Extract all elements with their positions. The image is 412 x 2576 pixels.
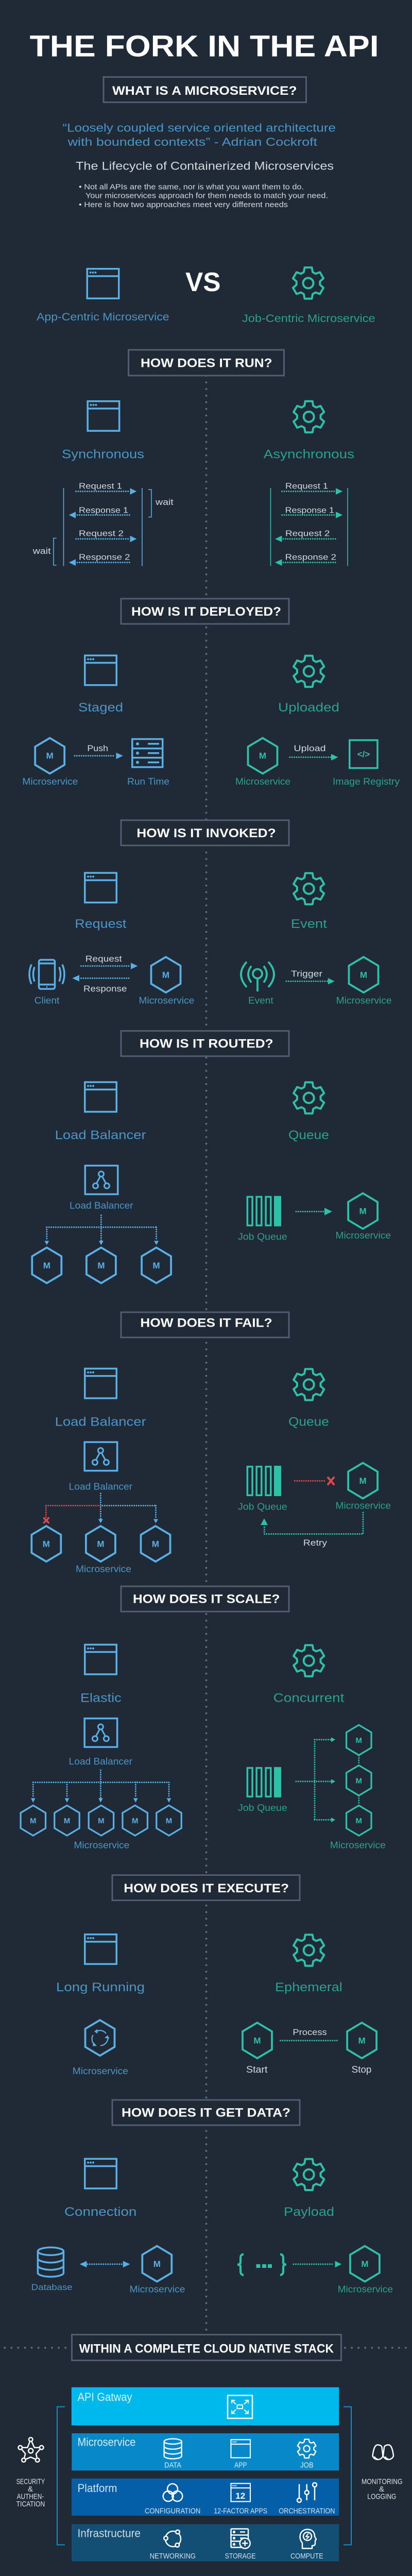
panel: asynchronous sequence: Request 2 [285, 530, 330, 538]
icon: load balancer [84, 1718, 117, 1747]
icon: load balancer [85, 1165, 118, 1194]
label: microservice: Microservice [336, 995, 392, 1006]
microservice hexagon [248, 738, 277, 774]
heading: fail: HOW DOES IT FAIL? [140, 1316, 272, 1330]
stop hexagon [347, 2023, 376, 2058]
routing arrows with failure [44, 1494, 158, 1523]
microservice hexagon [349, 957, 378, 992]
icon: client phone [29, 960, 64, 989]
panel: platform layer: CONFIGURATION [145, 2507, 200, 2516]
long running microservice hexagon [85, 2020, 114, 2056]
icon: gear [294, 873, 324, 904]
icon: app window [84, 1935, 117, 1964]
heading: what is a microservice [104, 77, 306, 102]
label: microservice: Microservice [330, 1839, 386, 1851]
heading: invoked [121, 820, 289, 845]
label: uploaded: Uploaded [278, 701, 339, 715]
icon: gear [294, 1369, 324, 1400]
heading: run [129, 350, 284, 376]
panel: platform layer: 12-FACTOR APPS [214, 2507, 267, 2516]
routing arrows [44, 1215, 159, 1245]
label: request: Request [75, 917, 127, 931]
label: connection: Connection [64, 2205, 136, 2219]
title: THE FORK IN THE API [30, 29, 379, 63]
microservice hexagons [21, 1805, 181, 1836]
panel: microservice layer: JOB [300, 2461, 314, 2469]
failed arrow [295, 1478, 334, 1484]
request and response arrows: Response [83, 984, 127, 993]
microservice hexagon: M [359, 1476, 367, 1486]
label: stop: Stop [352, 2064, 371, 2075]
retry arrow [261, 1513, 363, 1548]
bullet list [79, 183, 328, 209]
microservice hexagons: M [153, 1261, 160, 1270]
label: microservice: Microservice [338, 2283, 393, 2295]
icon: gear [294, 1645, 324, 1676]
label: job queue: Job Queue [238, 1802, 287, 1813]
panel: synchronous sequence: wait [32, 546, 51, 556]
icon: image registry [350, 740, 377, 768]
heading: deployed: HOW IS IT DEPLOYED? [131, 605, 281, 619]
label: start: Start [246, 2064, 267, 2075]
microservice hexagons: M [152, 1539, 159, 1549]
push arrow [75, 743, 123, 759]
label: load balancer: Load Balancer [70, 1200, 133, 1211]
label: long running: Long Running [56, 1980, 145, 1994]
heading: data [112, 2100, 300, 2125]
microservice hexagons: M [356, 1736, 362, 1745]
label: staged: Staged [78, 701, 123, 715]
icon: event antenna [241, 962, 274, 991]
quote [63, 122, 336, 148]
heading: execute [112, 1875, 300, 1900]
microservice hexagons: M [64, 1817, 70, 1825]
icon: app window [84, 1082, 117, 1112]
icon: gear [294, 656, 324, 687]
microservice hexagons: M [43, 1539, 50, 1549]
panel: platform layer: ORCHESTRATION [279, 2507, 335, 2516]
label: load balancer: Load Balancer [55, 1415, 146, 1429]
panel: synchronous sequence [32, 482, 174, 566]
panel: microservice layer [72, 2433, 339, 2470]
trigger arrow: Trigger [291, 969, 322, 978]
payload arrow [294, 2261, 341, 2267]
label: monitoring: MONITORING [362, 2478, 403, 2486]
label: synchronous: Synchronous [62, 447, 144, 461]
label: microservice: Microservice [130, 2283, 185, 2295]
panel: api gateway [72, 2387, 339, 2426]
icon: load balancer [84, 1442, 117, 1471]
microservice hexagon: M [361, 2259, 368, 2269]
label: load balancer: Load Balancer [55, 1128, 146, 1142]
microservice hexagons: M [97, 1261, 105, 1270]
icon: security star [19, 2437, 43, 2462]
label: monitoring [362, 2478, 403, 2501]
icon: job queue [247, 1767, 281, 1798]
icon: database [38, 2247, 63, 2277]
microservice hexagons: M [356, 1817, 362, 1825]
panel: synchronous sequence: Request 2 [79, 530, 124, 538]
label: job-centric: Job-Centric Microservice [242, 312, 375, 325]
icon: app window [84, 1368, 117, 1398]
label: client: Client [35, 995, 59, 1006]
panel: infrastructure layer: COMPUTE [290, 2552, 323, 2561]
icon: app window [84, 2159, 117, 2189]
icon: app window [84, 873, 117, 903]
label: elastic: Elastic [80, 1691, 122, 1705]
process arrow [280, 2027, 339, 2041]
heading: invoked: HOW IS IT INVOKED? [136, 826, 276, 840]
label: job queue: Job Queue [238, 1231, 287, 1242]
label: security: TICATION [16, 2500, 45, 2509]
heading: execute: HOW DOES IT EXECUTE? [124, 1882, 289, 1895]
label: job queue: Job Queue [238, 1501, 287, 1512]
microservice hexagons: M [97, 1539, 104, 1549]
microservice hexagon: M [46, 751, 54, 760]
icon: image registry: </> [357, 749, 370, 759]
panel: microservice layer: Microservice [77, 2435, 135, 2448]
bullet list: • Not all APIs are the same, nor is what you want them to do. [79, 183, 304, 191]
panel: platform layer: 12 [235, 2491, 245, 2501]
microservice hexagons [31, 1526, 170, 1562]
microservice hexagons: M [132, 1817, 138, 1825]
panel: platform layer [72, 2479, 339, 2516]
label: security: & [28, 2485, 33, 2494]
stop hexagon: M [358, 2036, 366, 2045]
panel: asynchronous sequence: Response 1 [285, 506, 334, 515]
icon: job queue [247, 1466, 281, 1496]
panel: synchronous sequence: Request 1 [79, 482, 122, 491]
horizontal dots [5, 2347, 407, 2349]
microservice hexagons: M [43, 1261, 50, 1270]
label: security: AUTHEN- [17, 2493, 44, 2501]
microservice hexagon [142, 2246, 171, 2281]
panel: infrastructure layer [72, 2524, 339, 2562]
request and response arrows [72, 954, 138, 993]
label: ephemeral: Ephemeral [275, 1980, 342, 1994]
heading: stack: WITHIN A COMPLETE CLOUD NATIVE STACK [79, 2342, 334, 2356]
push arrow: Push [87, 743, 108, 753]
start hexagon: M [253, 2036, 261, 2045]
microservice hexagon: M [153, 2259, 161, 2269]
heading: routed: HOW IS IT ROUTED? [140, 1037, 273, 1051]
retry arrow: Retry [303, 1538, 328, 1548]
heading: deployed [121, 599, 289, 624]
label: event: Event [248, 995, 273, 1006]
label: security: SECURITY [16, 2478, 45, 2486]
label: microservice: Microservice [235, 776, 290, 787]
microservice hexagon: M [359, 1207, 367, 1216]
icon: gear [294, 401, 324, 432]
label: security [16, 2478, 45, 2509]
microservice hexagon [151, 957, 180, 992]
routing arrows [31, 1770, 171, 1803]
VS: VS [185, 267, 220, 297]
label: monitoring: & [379, 2485, 384, 2494]
panel: synchronous sequence: Response 1 [79, 506, 128, 515]
microservice hexagon [35, 738, 64, 774]
heading: run: HOW DOES IT RUN? [141, 357, 272, 370]
microservice hexagon: M [360, 970, 367, 980]
microservice hexagons: M [30, 1817, 37, 1825]
center divider dots [205, 376, 207, 2330]
panel: platform layer: Platform [77, 2482, 117, 2495]
heading: what is a microservice: WHAT IS A MICROSERVICE? [112, 84, 297, 98]
process arrow: Process [293, 2027, 327, 2037]
icon: payload braces [237, 2255, 286, 2275]
trigger arrow [286, 969, 335, 985]
request and response arrows: Request [85, 954, 122, 963]
icon: gear [293, 267, 323, 299]
label: asynchronous: Asynchronous [264, 447, 354, 461]
label: run time: Run Time [127, 776, 169, 787]
bracket right [344, 2407, 351, 2545]
icon: gear [294, 1935, 324, 1966]
panel: synchronous sequence: wait [155, 497, 174, 507]
label: microservice: Microservice [74, 1839, 129, 1851]
label: load balancer: Load Balancer [69, 1756, 132, 1767]
icon: app window [84, 1645, 117, 1674]
label: app-centric: App-Centric Microservice [37, 311, 169, 323]
heading: fail [121, 1312, 289, 1337]
queue arrow [296, 1208, 332, 1215]
panel: synchronous sequence: Response 2 [79, 553, 130, 562]
panel: infrastructure layer: NETWORKING [150, 2552, 196, 2561]
concurrent arrows [296, 1737, 335, 1822]
label: queue: Queue [288, 1128, 329, 1142]
label: database: Database [31, 2282, 73, 2292]
quote: with bounded contexts” - Adrian Cockroft [67, 135, 318, 148]
microservice hexagons: M [98, 1817, 105, 1825]
label: load balancer: Load Balancer [69, 1481, 132, 1492]
icon: binoculars [373, 2445, 393, 2460]
microservice hexagon [348, 1463, 377, 1498]
microservice hexagon [350, 2246, 380, 2281]
microservice hexagons [347, 1725, 371, 1836]
heading: scale [121, 1586, 289, 1612]
upload arrow: Upload [294, 743, 326, 753]
heading: stack [72, 2335, 341, 2361]
microservice hexagon [348, 1193, 377, 1229]
label: event: Event [291, 917, 327, 931]
icon: app window [87, 401, 119, 431]
label: payload: Payload [284, 2205, 334, 2219]
heading: routed [121, 1031, 289, 1056]
label: microservice: Microservice [76, 1564, 131, 1574]
icon: job queue [247, 1196, 281, 1226]
panel: microservice layer: APP [234, 2461, 247, 2469]
microservice hexagon: M [162, 970, 169, 980]
icon: run time servers [131, 739, 163, 767]
bullet list: Your microservices approach for them needs to match your need. [85, 192, 328, 200]
panel: infrastructure layer: STORAGE [225, 2552, 255, 2561]
label: microservice: Microservice [73, 2065, 128, 2076]
microservice hexagon: M [259, 751, 266, 760]
label: microservice: Microservice [336, 1230, 391, 1241]
panel: api gateway: API Gatway [77, 2391, 132, 2403]
start hexagon [243, 2023, 272, 2058]
quote: “Loosely coupled service oriented architecture [63, 122, 336, 134]
label: queue: Queue [288, 1415, 329, 1429]
subtitle: The Lifecycle of Containerized Microservices [76, 160, 334, 172]
heading: data: HOW DOES IT GET DATA? [122, 2106, 290, 2120]
panel: infrastructure layer: Infrastructure [77, 2527, 141, 2539]
upload arrow [290, 743, 338, 760]
label: microservice: Microservice [22, 776, 78, 787]
bullet list: • Here is how two approaches meet very different needs [79, 201, 288, 209]
heading: scale: HOW DOES IT SCALE? [133, 1592, 280, 1606]
label: microservice: Microservice [139, 995, 194, 1006]
panel: asynchronous sequence [271, 482, 348, 566]
label: concurrent: Concurrent [273, 1691, 345, 1705]
icon: app window [87, 269, 119, 298]
label: microservice: Microservice [336, 1500, 391, 1511]
icon: app window [84, 655, 117, 685]
bracket left [57, 2407, 65, 2545]
icon: gear [294, 2159, 324, 2190]
label: image registry: Image Registry [333, 776, 400, 787]
panel: asynchronous sequence: Response 2 [285, 553, 336, 562]
microservice hexagons [32, 1248, 171, 1283]
label: monitoring: LOGGING [367, 2493, 396, 2501]
microservice hexagons: M [166, 1817, 172, 1825]
bidirectional arrow [80, 2261, 130, 2267]
panel: microservice layer: DATA [164, 2461, 181, 2469]
panel: asynchronous sequence: Request 1 [285, 482, 328, 491]
microservice hexagons: M [356, 1776, 362, 1785]
icon: gear [294, 1082, 324, 1113]
